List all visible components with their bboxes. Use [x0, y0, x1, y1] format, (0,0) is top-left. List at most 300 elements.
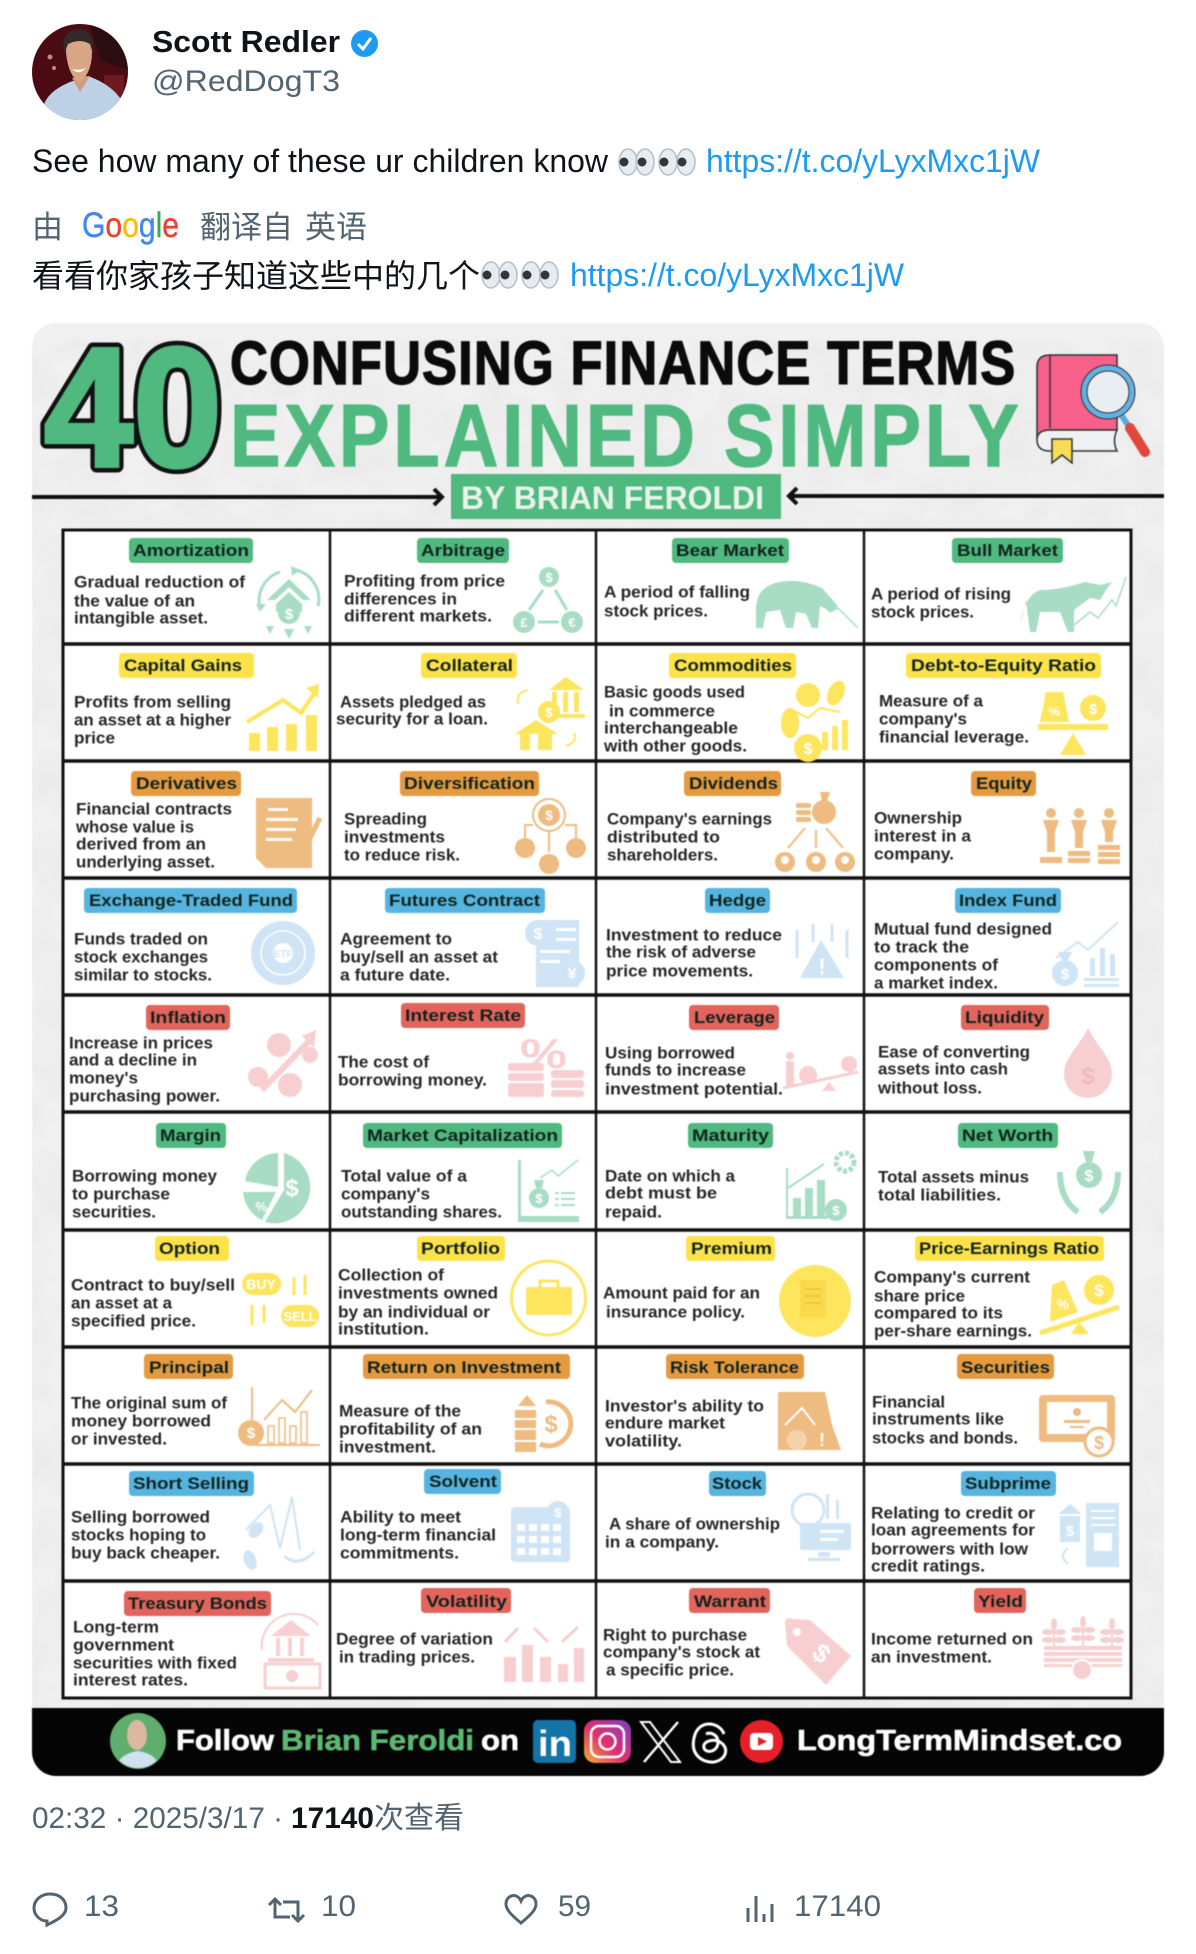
definition: differences in	[344, 590, 457, 609]
definition: endure market	[605, 1414, 725, 1433]
term pill: Exchange-Traded Fund	[89, 891, 293, 910]
icon: credit document	[1058, 1503, 1119, 1567]
icon: policy clipboard	[779, 1265, 851, 1337]
stat: replies: 13	[84, 1890, 119, 1923]
cell: Equity	[874, 771, 1120, 864]
term pill	[363, 1123, 562, 1148]
cell: Index Fund	[874, 888, 1119, 993]
term pill	[666, 1354, 804, 1379]
term pill	[144, 1354, 233, 1379]
cell: Subprime	[871, 1471, 1119, 1576]
cell: Return on Investment	[339, 1354, 571, 1457]
definition: to track the	[874, 938, 969, 957]
term pill: Commodities	[674, 656, 792, 675]
definition: profitability of an	[339, 1420, 482, 1439]
icon: currency document: $	[534, 926, 543, 943]
definition	[878, 1168, 1029, 1205]
definition: A period of falling	[604, 583, 750, 602]
definition: Borrowing money	[72, 1167, 218, 1186]
definition: Selling borrowed	[71, 1508, 210, 1527]
translation attribution	[32, 206, 367, 245]
cell: Stock	[605, 1471, 851, 1561]
icon: pie chart: $	[285, 1175, 299, 1202]
icon: signed contract	[256, 798, 320, 868]
definition: Investor's ability to	[605, 1397, 764, 1416]
definition: money's	[69, 1069, 138, 1088]
definition: price movements.	[606, 962, 753, 981]
definition: Amount paid for an	[603, 1284, 760, 1303]
title: explained simply: EXPLAINED SIMPLY	[230, 388, 1019, 485]
cell: Volatility	[336, 1588, 584, 1682]
definition	[606, 926, 782, 981]
definition: per-share earnings.	[874, 1322, 1032, 1341]
definition: security for a loan.	[336, 710, 488, 729]
term pill: Equity	[976, 774, 1033, 793]
stat: likes	[506, 1890, 591, 1923]
definition: volatility.	[605, 1432, 682, 1451]
term pill: Principal	[149, 1358, 229, 1377]
term pill	[957, 1354, 1054, 1379]
definition: long-term financial	[340, 1526, 496, 1545]
icon: risk gauge: !	[819, 1430, 825, 1450]
definition: Agreement to	[340, 930, 452, 949]
definition	[344, 572, 505, 626]
cell: Warrant	[603, 1588, 851, 1685]
definition: The original sum of	[71, 1394, 227, 1413]
arrow: right pointing to byline	[789, 488, 1164, 504]
icon: balance scale: $	[1089, 701, 1098, 718]
term pill: Inflation	[150, 1008, 226, 1027]
definition: money borrowed	[71, 1412, 211, 1431]
definition	[71, 1508, 220, 1563]
definition: Increase in prices	[69, 1034, 213, 1053]
definition: stock exchanges	[74, 948, 208, 967]
title: big 40: 40	[44, 313, 222, 503]
term pill	[156, 1123, 226, 1148]
icon: credit document: $	[1066, 1523, 1075, 1540]
cell: Maturity	[605, 1123, 854, 1222]
tweet text	[32, 143, 1041, 179]
translation attribution: 由	[32, 210, 63, 245]
icon: YouTube	[740, 1720, 783, 1763]
icon: Threads	[693, 1724, 726, 1762]
icon: market chart	[518, 1160, 579, 1222]
icon: buy sell	[242, 1273, 319, 1327]
definition: loan agreements for	[871, 1521, 1035, 1540]
cell: Inflation	[69, 1005, 318, 1106]
term pill	[155, 1236, 229, 1261]
definition: investments	[344, 828, 445, 847]
term pill	[689, 1588, 770, 1613]
icon: bear	[756, 581, 858, 628]
definition: whose value is	[75, 818, 194, 837]
stat: replies	[34, 1890, 119, 1925]
definition: credit ratings.	[871, 1557, 985, 1576]
icon: crops and money	[1042, 1616, 1124, 1680]
definition: a market index.	[874, 974, 998, 993]
icon: three shareholders	[1040, 808, 1120, 864]
term pill: Amortization	[133, 541, 249, 560]
tweet text: https://t.co/yLyxMxc1jW	[706, 143, 1041, 179]
title: big 40: 40	[44, 313, 222, 503]
definition: a future date.	[340, 966, 450, 985]
definition: Financial contracts	[76, 800, 232, 819]
definition	[71, 1276, 235, 1331]
definition: purchasing power.	[69, 1087, 220, 1106]
cell: Capital Gains	[74, 653, 319, 751]
icon: bull	[1020, 577, 1126, 632]
definition	[339, 1402, 482, 1457]
photo: Brian Feroldi	[110, 1713, 166, 1769]
cell: Collateral	[336, 653, 585, 750]
definition: Profits from selling	[74, 693, 231, 712]
cell: Futures Contract	[340, 888, 585, 987]
term pill	[672, 538, 789, 563]
definition: company's stock at	[603, 1643, 760, 1662]
cell: Premium	[603, 1236, 851, 1337]
icon: distribution tree	[515, 799, 586, 874]
term pill: Interest Rate	[405, 1006, 521, 1025]
cell: Solvent	[340, 1469, 570, 1563]
icon: buy sell: BUY	[246, 1276, 276, 1292]
avatar: Scott Redler	[32, 24, 128, 120]
definition: Funds traded on	[74, 930, 208, 949]
definition: government	[73, 1636, 174, 1655]
cell: Risk Tolerance	[605, 1354, 841, 1451]
term pill	[952, 538, 1063, 563]
icon: treasury bank	[262, 1614, 320, 1688]
definition: Right to purchase	[603, 1626, 747, 1645]
definition	[338, 1266, 498, 1339]
cell: Portfolio	[338, 1236, 586, 1339]
definition: A share of ownership	[609, 1515, 780, 1534]
icon: ETF network: ETF	[274, 949, 292, 960]
icon: verified badge	[351, 30, 378, 57]
icon: warning with arrows	[797, 924, 847, 979]
cell: Bear Market	[604, 538, 858, 628]
definition: in trading prices.	[339, 1648, 475, 1667]
term pill	[421, 1588, 511, 1613]
definition: Measure of a	[879, 692, 984, 711]
definition: assets into cash	[878, 1060, 1008, 1079]
definition: Total assets minus	[878, 1168, 1029, 1187]
term pill: Collateral	[426, 656, 513, 675]
term pill	[400, 771, 539, 796]
definition	[605, 1167, 736, 1222]
definition: securities.	[72, 1203, 156, 1222]
icon: bank and house: $	[545, 705, 553, 720]
term pill	[119, 653, 254, 678]
definition: an asset at a	[71, 1294, 173, 1313]
cell: Leverage	[605, 1005, 858, 1099]
term pill	[709, 1471, 766, 1496]
definition: Ability to meet	[340, 1508, 461, 1527]
cell: Net Worth	[878, 1123, 1118, 1212]
definition: interest in a	[874, 827, 972, 846]
definition: share price	[874, 1287, 965, 1306]
definition: stock prices.	[604, 602, 708, 621]
term pill	[915, 1236, 1104, 1261]
definition: shareholders.	[607, 846, 718, 865]
arrow: left pointing to byline	[32, 489, 442, 505]
icon: hands holding bag: $	[1085, 1168, 1094, 1185]
definition: funds to increase	[605, 1061, 746, 1080]
panel: terms grid	[63, 530, 1131, 1698]
definition	[871, 1630, 1033, 1667]
definition	[336, 1630, 493, 1667]
icon: inflation arrow	[248, 1030, 318, 1097]
icon: index growth	[1052, 922, 1119, 987]
definition: Investment to reduce	[606, 926, 782, 945]
term pill: Market Capitalization	[367, 1126, 558, 1145]
timestamp and views: 次查看	[374, 1802, 464, 1835]
cell: Short Selling	[71, 1471, 314, 1571]
icon: commodities	[781, 678, 849, 762]
definition: company's	[341, 1185, 430, 1204]
icon: price tag: $	[806, 1637, 837, 1670]
definition	[340, 1508, 496, 1563]
term pill: Arbitrage	[421, 541, 505, 560]
icon: volatile bars	[504, 1627, 584, 1682]
icon: risk gauge	[778, 1392, 841, 1450]
tweet text: See how many of these ur children know	[32, 143, 609, 179]
term pill	[363, 1354, 570, 1379]
definition: Ownership	[874, 809, 962, 828]
definition: debt must be	[605, 1184, 717, 1203]
icon: percent and coins	[508, 1030, 584, 1097]
definition: Long-term	[73, 1618, 159, 1637]
icon: bond certificate: $	[1094, 1433, 1104, 1453]
cell: Amortization	[74, 538, 319, 639]
definition: insurance policy.	[606, 1303, 745, 1322]
definition: to purchase	[72, 1185, 170, 1204]
term pill	[146, 1005, 230, 1030]
term pill: Yield	[978, 1592, 1023, 1611]
term pill	[417, 1236, 505, 1261]
definition: in a company.	[605, 1533, 719, 1552]
icon: pie chart: %	[255, 1199, 267, 1214]
icon: tilted scale: $	[1094, 1281, 1104, 1300]
icon: book and magnifier	[1037, 355, 1145, 463]
cell: Debt-to-Equity Ratio	[879, 653, 1108, 755]
cell: Bull Market	[871, 538, 1126, 632]
author handle: @RedDogT3	[152, 65, 340, 98]
cell: Exchange-Traded Fund	[74, 888, 315, 985]
definition	[607, 810, 772, 865]
term pill: Risk Tolerance	[670, 1358, 799, 1377]
definition: in commerce	[609, 702, 715, 721]
definition	[871, 1504, 1035, 1576]
definition: similar to stocks.	[74, 966, 212, 985]
definition: Assets pledged as	[340, 693, 486, 712]
icon: monitor and magnifier	[792, 1494, 851, 1561]
term pill: Warrant	[694, 1592, 766, 1611]
definition: borrowers with low	[871, 1540, 1029, 1559]
definition: interchangeable	[604, 719, 738, 738]
definition: by an individual or	[338, 1303, 490, 1322]
icon: dividend payout	[775, 792, 855, 872]
term pill	[958, 1123, 1058, 1148]
cell: Securities	[872, 1354, 1115, 1456]
definition: instruments like	[872, 1410, 1004, 1429]
definition: and a decline in	[69, 1051, 197, 1070]
term pill: Treasury Bonds	[128, 1594, 267, 1613]
definition: Gradual reduction of	[74, 573, 245, 592]
definition	[871, 585, 1011, 622]
term pill: Portfolio	[421, 1239, 500, 1258]
definition: components of	[874, 956, 998, 975]
icon: percent and coins: %	[520, 1030, 567, 1077]
cell: Derivatives	[75, 771, 320, 872]
term pill	[421, 653, 517, 678]
term pill	[974, 1588, 1026, 1613]
stat: reposts	[269, 1890, 356, 1923]
term pill	[669, 653, 796, 678]
term pill	[385, 888, 545, 913]
panel: infographic card	[32, 313, 1164, 1709]
icon: house with coin	[256, 566, 319, 639]
definition	[74, 693, 231, 748]
icon: tilted scale: %	[1057, 1296, 1070, 1312]
term pill: Liquidity	[965, 1008, 1045, 1027]
term pill: Volatility	[426, 1592, 508, 1611]
cell: Interest Rate	[338, 1003, 584, 1097]
icon: distribution tree: $	[545, 807, 553, 823]
definition	[72, 1167, 218, 1222]
definition: Date on which a	[605, 1167, 736, 1186]
icon: currency document	[525, 920, 585, 987]
definition: investment.	[339, 1438, 436, 1457]
definition: repaid.	[605, 1203, 662, 1222]
definition: Total value of a	[341, 1167, 468, 1186]
icon: growth from coin	[238, 1387, 320, 1446]
definition	[341, 1167, 502, 1222]
definition: Mutual fund designed	[874, 920, 1052, 939]
term pill	[686, 1236, 775, 1261]
icon: return coins	[515, 1395, 571, 1452]
definition: Ease of converting	[878, 1043, 1030, 1062]
term pill	[961, 1005, 1049, 1030]
definition: underlying asset.	[76, 853, 215, 872]
definition: derived from an	[76, 835, 206, 854]
cell: Commodities	[603, 653, 849, 762]
term pill	[689, 1005, 779, 1030]
definition: stock prices.	[871, 603, 974, 622]
term pill: Maturity	[692, 1126, 770, 1145]
definition: specified price.	[71, 1312, 196, 1331]
icon: maturity chart	[786, 1153, 854, 1221]
icon: ETF network	[251, 921, 315, 985]
definition: a specific price.	[606, 1661, 734, 1680]
icon: commodities: $	[804, 741, 813, 758]
icon: exchange triangle	[513, 567, 583, 633]
term pill	[124, 1591, 271, 1616]
term pill: Dividends	[689, 774, 778, 793]
icon: index growth: $	[1061, 966, 1070, 983]
definition: commitments.	[340, 1544, 459, 1563]
translation attribution: Google	[82, 206, 179, 245]
term pill	[129, 1471, 254, 1496]
definition	[340, 930, 498, 985]
definition: or invested.	[71, 1430, 167, 1449]
icon: currency document: ¥	[568, 966, 577, 983]
term pill: Hedge	[709, 891, 766, 910]
term pill	[424, 1469, 501, 1494]
term pill: Margin	[160, 1126, 221, 1145]
icon: Instagram	[584, 1720, 631, 1763]
icon: growth from coin: $	[247, 1425, 256, 1442]
author name: Scott Redler	[152, 24, 340, 59]
definition	[74, 573, 245, 628]
icon: eyes emoji translated	[482, 262, 558, 288]
definition: Using borrowed	[605, 1044, 735, 1063]
definition: company.	[874, 845, 954, 864]
cell: Option	[71, 1236, 319, 1331]
cell: Arbitrage	[344, 538, 583, 633]
term pill	[129, 538, 253, 563]
term pill: Net Worth	[962, 1126, 1053, 1145]
stat: views: 17140	[794, 1890, 881, 1923]
icon: buy sell: SELL	[283, 1309, 317, 1324]
definition	[874, 809, 972, 864]
definition: Basic goods used	[604, 683, 745, 702]
definition: compared to its	[874, 1304, 1003, 1323]
timestamp and views: 17140	[291, 1802, 374, 1835]
definition	[874, 920, 1052, 993]
cell: Dividends	[607, 771, 855, 872]
cell: Margin	[72, 1123, 310, 1223]
icon: eyes emoji	[619, 149, 695, 175]
definition: different markets.	[344, 607, 492, 626]
term pill: Subprime	[965, 1474, 1051, 1493]
icon: money drop	[1064, 1028, 1112, 1098]
title: confusing finance terms: CONFUSING FINANCE TERMS	[230, 329, 1015, 398]
cell: Price-Earnings Ratio	[874, 1236, 1119, 1341]
icon: maturity chart: $	[832, 1203, 840, 1218]
icon: house with coin: $	[285, 606, 294, 623]
term pill: Diversification	[404, 774, 535, 793]
definition: price	[74, 729, 115, 748]
cell: Principal	[71, 1354, 320, 1449]
definition	[69, 1034, 220, 1106]
cell: Yield	[871, 1588, 1124, 1680]
icon: exchange triangle: €	[568, 615, 576, 630]
cell: Market Capitalization	[341, 1123, 579, 1222]
term pill	[688, 1123, 773, 1148]
icon: LinkedIn	[533, 1720, 576, 1764]
term pill: Solvent	[429, 1472, 497, 1491]
timestamp and views	[32, 1802, 464, 1835]
definition: company's	[879, 710, 967, 729]
definition: distributed to	[607, 828, 720, 847]
definition: with other goods.	[603, 737, 747, 756]
term pill: Price-Earnings Ratio	[919, 1239, 1099, 1258]
term pill: Derivatives	[136, 774, 237, 793]
icon: money drop: $	[1081, 1063, 1095, 1090]
follow text	[176, 1725, 519, 1757]
definition: an investment.	[871, 1648, 992, 1667]
definition: investments owned	[338, 1284, 498, 1303]
icon: bond certificate	[1039, 1395, 1115, 1456]
term pill: Bear Market	[676, 541, 784, 560]
icon: pie chart	[243, 1153, 310, 1223]
website: LongTermMindset.co	[797, 1725, 1122, 1757]
term pill	[971, 771, 1036, 796]
term pill: Securities	[961, 1358, 1050, 1377]
definition	[75, 800, 232, 872]
icon: briefcase in ring	[512, 1261, 586, 1335]
term pill	[906, 653, 1101, 678]
